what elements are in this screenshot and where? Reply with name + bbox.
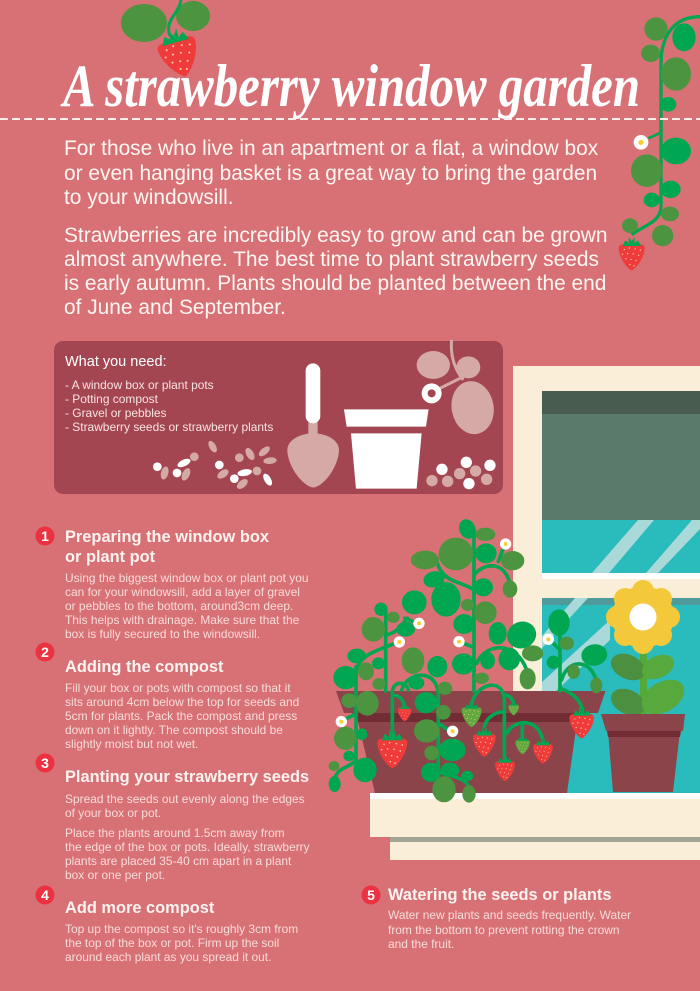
step 2: down on it lightly. The compost should be	[65, 723, 283, 737]
intro text: is early autumn. Plants should be planted between the end	[64, 272, 606, 295]
plant: right	[543, 610, 608, 739]
lower window pane	[542, 598, 700, 793]
step 3: Spread the seeds out evenly along the edges	[65, 792, 305, 806]
step 5: and the fruit.	[388, 937, 454, 951]
window frame	[513, 366, 700, 796]
plant: centre hanging	[377, 648, 475, 802]
plant: centre strawberries	[462, 685, 553, 781]
step 1: Using the biggest window box or plant pot you	[65, 571, 309, 585]
step 3: the edge of the box or pots. Ideally, strawberry	[65, 840, 310, 854]
step 4: Add more compost	[65, 899, 215, 917]
step 5	[362, 886, 631, 951]
step 5: Water new plants and seeds frequently. Water	[388, 908, 631, 922]
step 1 number	[36, 526, 54, 546]
step 2: Fill your box or pots with compost so that it	[65, 681, 291, 695]
intro text: Strawberries are incredibly easy to grow and can be grown	[64, 224, 607, 247]
intro text: or even hanging basket is a great way to bring the garden	[64, 162, 597, 185]
plant: far left trailing	[329, 649, 378, 791]
strawberry plants	[329, 518, 608, 802]
terracotta pot	[601, 714, 685, 792]
step 1: or pebbles to the bottom, around3cm deep.	[65, 599, 293, 613]
step 3: plants are placed 35-40 cm apart in a plant	[65, 854, 292, 868]
hanging strawberry top	[123, 0, 208, 82]
flower stem and leaves	[607, 649, 690, 721]
step 2: Adding the compost	[65, 658, 224, 676]
what you need text: - Potting compost	[65, 392, 159, 406]
step 1 number: 1	[41, 528, 49, 544]
step 2: sits around 4cm below the top for seeds and	[65, 695, 299, 709]
panel: what you need	[54, 340, 503, 494]
step 3: of your box or pot.	[65, 806, 161, 820]
step 2: slightly moist but not wet.	[65, 737, 198, 751]
what you need text	[65, 354, 273, 434]
icon: plant sprig	[417, 340, 498, 438]
intro text: almost anywhere. The best time to plant strawberry seeds	[64, 248, 599, 271]
step 4	[36, 886, 298, 964]
step 3 number: 3	[41, 755, 49, 771]
flower pot plant	[601, 580, 690, 792]
icon: seeds	[153, 440, 277, 491]
icon: trowel	[287, 363, 339, 488]
what you need text: - Gravel or pebbles	[65, 406, 167, 420]
what you need text: - Strawberry seeds or strawberry plants	[65, 420, 273, 434]
plant: left upper	[357, 591, 426, 691]
step 1: This helps with drainage. Make sure that the	[65, 613, 300, 627]
step 5: from the bottom to prevent rotting the crown	[388, 923, 620, 937]
icon: pebbles	[426, 457, 496, 489]
upper window pane	[542, 391, 700, 579]
what you need text: What you need:	[65, 354, 167, 370]
step 4: around each plant as you spread it out.	[65, 950, 271, 964]
step 1: can for your windowsill, add a layer of gravel	[65, 585, 300, 599]
plant: tall centre	[412, 518, 543, 691]
window box	[336, 691, 606, 793]
step 5: Watering the seeds or plants	[388, 886, 611, 904]
step 5 number	[362, 886, 380, 904]
intro text: For those who live in an apartment or a flat, a window box	[64, 137, 599, 160]
step 4 number	[36, 886, 54, 904]
step 2 number	[36, 642, 54, 662]
yellow flower	[606, 580, 680, 654]
right climbing vine	[619, 17, 700, 270]
intro text	[64, 137, 607, 319]
step 3: box or one per pot.	[65, 868, 165, 882]
step 3	[36, 754, 310, 882]
step 1: or plant pot	[65, 548, 156, 566]
step 3 number	[36, 754, 54, 772]
step 5 number: 5	[367, 887, 375, 903]
step 4: the top of the box or pot. Firm up the soil	[65, 936, 279, 950]
what you need text: - A window box or plant pots	[65, 378, 214, 392]
intro text: of June and September.	[64, 296, 286, 319]
step 3: Planting your strawberry seeds	[65, 768, 309, 786]
dashed title rule	[0, 118, 700, 120]
step 2	[36, 642, 299, 751]
icon: plant pot	[344, 409, 429, 489]
step 4: Top up the compost so it's roughly 3cm from	[65, 922, 298, 936]
window sill	[370, 793, 700, 860]
intro text: to your windowsill.	[64, 186, 234, 209]
step 3: Place the plants around 1.5cm away from	[65, 826, 285, 840]
step 2: 5cm for plants. Pack the compost and press	[65, 709, 297, 723]
step 2 number: 2	[41, 644, 49, 660]
step 1: Preparing the window box	[65, 528, 269, 546]
step 1	[36, 526, 309, 641]
step 4 number: 4	[41, 887, 49, 903]
step 1: box is fully secured to the windowsill.	[65, 627, 260, 641]
